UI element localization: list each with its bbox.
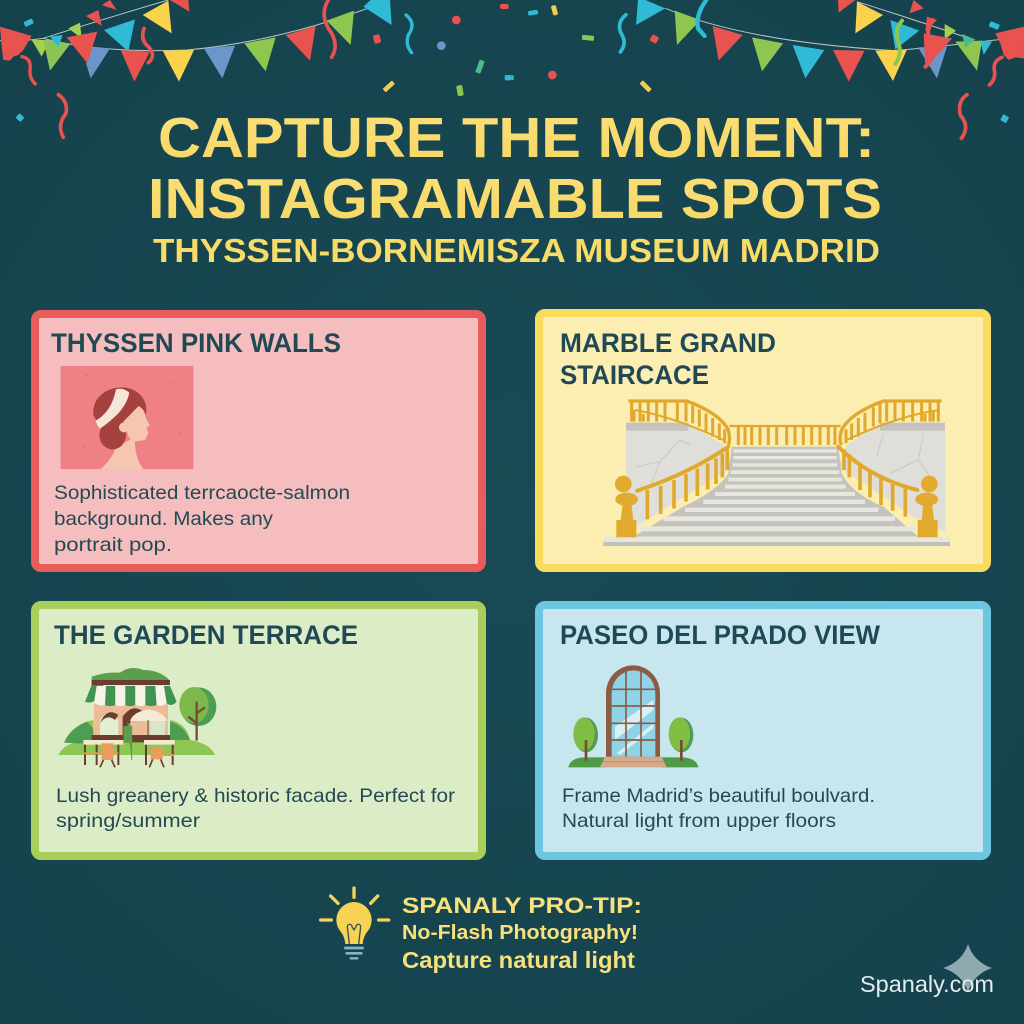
panel: Paseo del Prado view	[539, 605, 987, 856]
subtitle: THYSSEN-BORNEMISZA MUSEUM MADRID	[153, 232, 880, 269]
heading: Marble grand staircase: MARBLE GRAND	[560, 328, 776, 358]
text: Thyssen pink walls description: background. Makes any	[54, 508, 273, 530]
text: Thyssen pink walls description: Sophisticated terrcaocte-salmon	[54, 482, 350, 504]
logo: Spanaly.com: Spanaly.com	[860, 971, 994, 997]
text: Garden terrace description: spring/summer	[56, 810, 201, 832]
callout: pro tip: No-Flash Photography!	[402, 922, 638, 944]
icon: portrait on pink wall	[61, 366, 193, 469]
heading: The garden terrace: THE GARDEN TERRACE	[54, 620, 358, 650]
icon: grand staircase	[603, 401, 950, 546]
heading: Thyssen pink walls: THYSSEN PINK WALLS	[51, 328, 341, 358]
text: Prado view description	[562, 785, 875, 832]
icon: garden terrace cafe	[58, 668, 216, 767]
text: Thyssen pink walls description: portrait pop.	[54, 534, 172, 556]
panel: Thyssen pink walls	[35, 314, 482, 568]
bunting and confetti: top right	[512, 0, 1024, 138]
title: CAPTURE THE MOMENT:	[158, 106, 875, 170]
text: Thyssen pink walls description	[54, 482, 350, 556]
title	[148, 106, 882, 231]
icon: light bulb	[321, 888, 389, 958]
panel: Marble grand staircase	[539, 313, 987, 568]
heading: Marble grand staircase	[560, 328, 776, 390]
title: INSTAGRAMABLE SPOTS	[148, 167, 882, 231]
text: Prado view description: Frame Madrid’s beautiful boulvard.	[562, 785, 875, 807]
heading: Marble grand staircase: STAIRCACE	[560, 360, 709, 390]
icon: arched window with trees	[568, 665, 698, 767]
text: Garden terrace description: Lush greanery & historic facade. Perfect for	[56, 785, 456, 807]
text: Prado view description: Natural light from upper floors	[562, 810, 836, 832]
callout: pro tip	[402, 893, 642, 973]
callout: pro tip: SPANALY PRO-TIP:	[402, 893, 642, 918]
logo: Spanaly.com	[860, 944, 994, 997]
callout: pro tip: Capture natural light	[402, 947, 635, 973]
bunting and confetti: top left	[0, 0, 512, 137]
panel: The garden terrace	[35, 605, 482, 856]
heading: Paseo del Prado view: PASEO DEL PRADO VIEW	[560, 620, 880, 650]
text: Garden terrace description	[56, 785, 456, 832]
